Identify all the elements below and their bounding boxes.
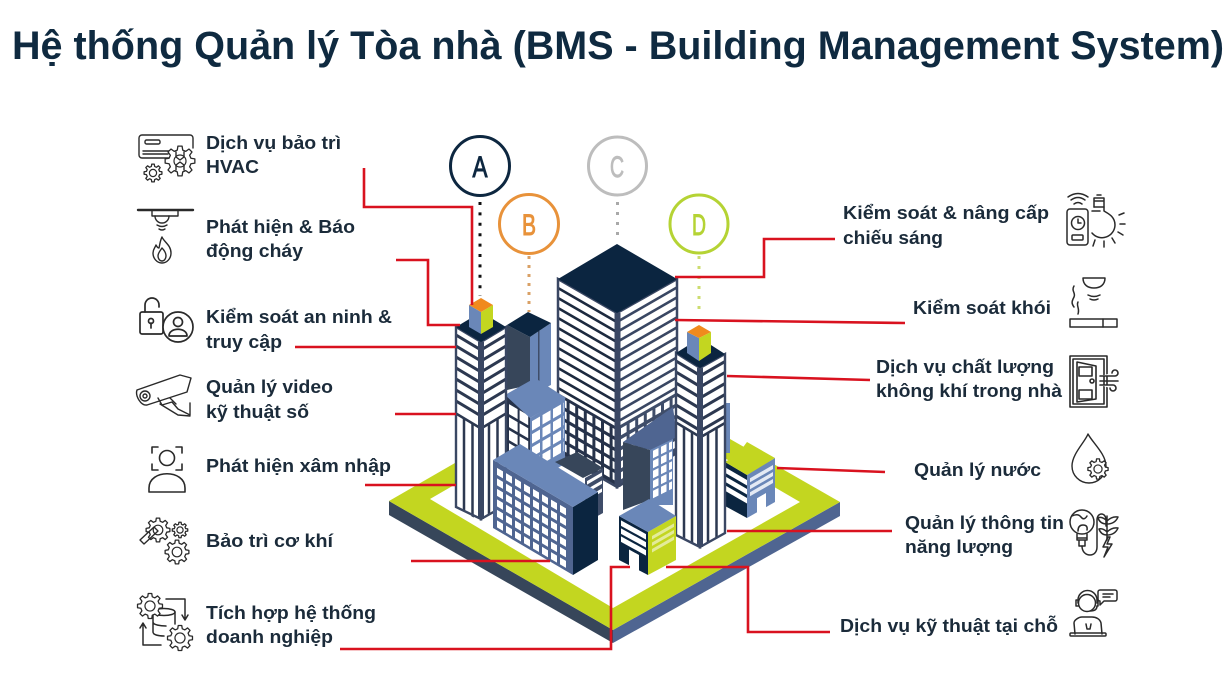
marker D: D — [692, 209, 706, 242]
label: fire detection: động cháy — [206, 240, 304, 261]
label: mechanical maintenance: Bảo trì cơ khí — [206, 530, 334, 551]
tower D — [676, 338, 725, 547]
label: enterprise integration: Tích hợp hệ thống — [206, 602, 376, 623]
tower D roof cube — [687, 325, 711, 361]
isometric city illustration — [389, 244, 840, 643]
label: intrusion detection: Phát hiện xâm nhập — [206, 455, 391, 476]
icon: CCTV camera — [137, 375, 191, 416]
title: Hệ thống Quản lý Tòa nhà (BMS - Building Management System) — [12, 24, 1224, 68]
mid block — [505, 378, 566, 484]
label: HVAC maintenance: HVAC — [206, 156, 259, 177]
icon: water drop with gear — [1072, 434, 1108, 483]
label: security and access — [206, 306, 392, 352]
label: indoor air quality: không khí trong nhà — [876, 380, 1063, 401]
left labels — [206, 132, 392, 647]
marker C — [588, 137, 646, 238]
label: digital video: Quản lý video — [206, 376, 333, 397]
icon: HVAC — [139, 135, 195, 182]
label: lighting control — [843, 202, 1049, 248]
label: HVAC maintenance — [206, 132, 341, 177]
label: fire detection — [206, 216, 355, 261]
label: fire detection: Phát hiện & Báo — [206, 216, 355, 237]
label: energy information — [905, 512, 1064, 557]
icon: mechanical gears — [140, 518, 189, 564]
label: energy information: năng lượng — [905, 536, 1013, 557]
right labels — [840, 202, 1064, 636]
red leader lines — [295, 168, 905, 649]
right side slab — [724, 403, 730, 453]
marker C: C — [610, 151, 624, 184]
icon: fire alarm — [138, 210, 193, 263]
marker B — [500, 194, 558, 312]
icon: door with airflow — [1070, 356, 1118, 407]
marker A: A — [472, 151, 488, 184]
label: indoor air quality: Dịch vụ chất lượng — [876, 356, 1054, 377]
label: smoke control: Kiểm soát khói — [913, 297, 1051, 318]
icon: energy bulb and plant — [1070, 510, 1118, 557]
building C tall tower — [558, 244, 677, 487]
label: security and access: Kiểm soát an ninh & — [206, 306, 392, 327]
center block — [623, 407, 677, 510]
front large block — [493, 444, 598, 575]
label: lighting control: Kiểm soát & nâng cấp — [843, 202, 1049, 223]
label: HVAC maintenance: Dịch vụ bảo trì — [206, 132, 341, 153]
label: water management: Quản lý nước — [914, 459, 1041, 480]
label: lighting control: chiếu sáng — [843, 227, 943, 248]
icon: lock and user — [140, 298, 193, 342]
marker D — [670, 195, 728, 312]
icon: systems integration — [138, 594, 192, 650]
label: digital video — [206, 376, 333, 422]
label: enterprise integration: doanh nghiệp — [206, 626, 333, 647]
small front building — [619, 499, 676, 579]
building B — [507, 312, 551, 395]
label: security and access: truy cập — [206, 331, 282, 352]
marker B: B — [522, 209, 536, 242]
icon: remote and bulb — [1067, 194, 1125, 247]
label: indoor air quality — [876, 356, 1063, 401]
icon: smoke sensor and cigarette — [1070, 278, 1117, 327]
label: energy information: Quản lý thông tin — [905, 512, 1064, 533]
label: enterprise integration — [206, 602, 376, 647]
label: on-site technical service: Dịch vụ kỹ thuật tại chỗ — [840, 615, 1058, 636]
dark low block — [555, 452, 603, 523]
small right building — [725, 442, 775, 518]
label: digital video: kỹ thuật số — [206, 401, 309, 422]
tower A roof cube — [469, 298, 493, 334]
icon: face recognition person — [149, 447, 185, 492]
marker A — [450, 136, 510, 296]
platform — [389, 372, 840, 643]
tower A — [456, 312, 506, 522]
icon: support agent — [1070, 590, 1117, 636]
